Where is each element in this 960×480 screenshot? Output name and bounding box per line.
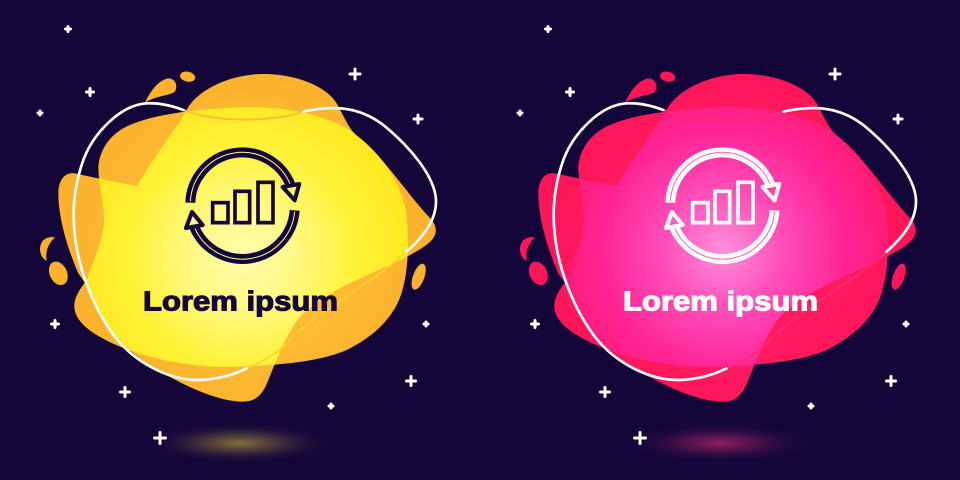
- panel: pink badge: [518, 26, 916, 463]
- icon: chart with refresh arrows, white: [666, 152, 779, 259]
- sparkle stars: right: [518, 26, 908, 444]
- panel: yellow badge: [38, 26, 436, 463]
- sparkle stars: left: [38, 26, 428, 444]
- icon: chart with refresh arrows, dark: [186, 152, 299, 259]
- glow: yellow floor shadow: [148, 423, 332, 463]
- outline ring: pink: [554, 103, 916, 380]
- abstract blobs: yellow: [40, 70, 436, 402]
- label: Lorem ipsum, white: Lorem ipsum: [623, 286, 818, 316]
- abstract blobs: pink: [520, 70, 916, 402]
- glow: pink floor shadow: [628, 423, 812, 463]
- label: Lorem ipsum, dark: Lorem ipsum: [143, 286, 338, 316]
- outline ring: yellow: [74, 103, 436, 380]
